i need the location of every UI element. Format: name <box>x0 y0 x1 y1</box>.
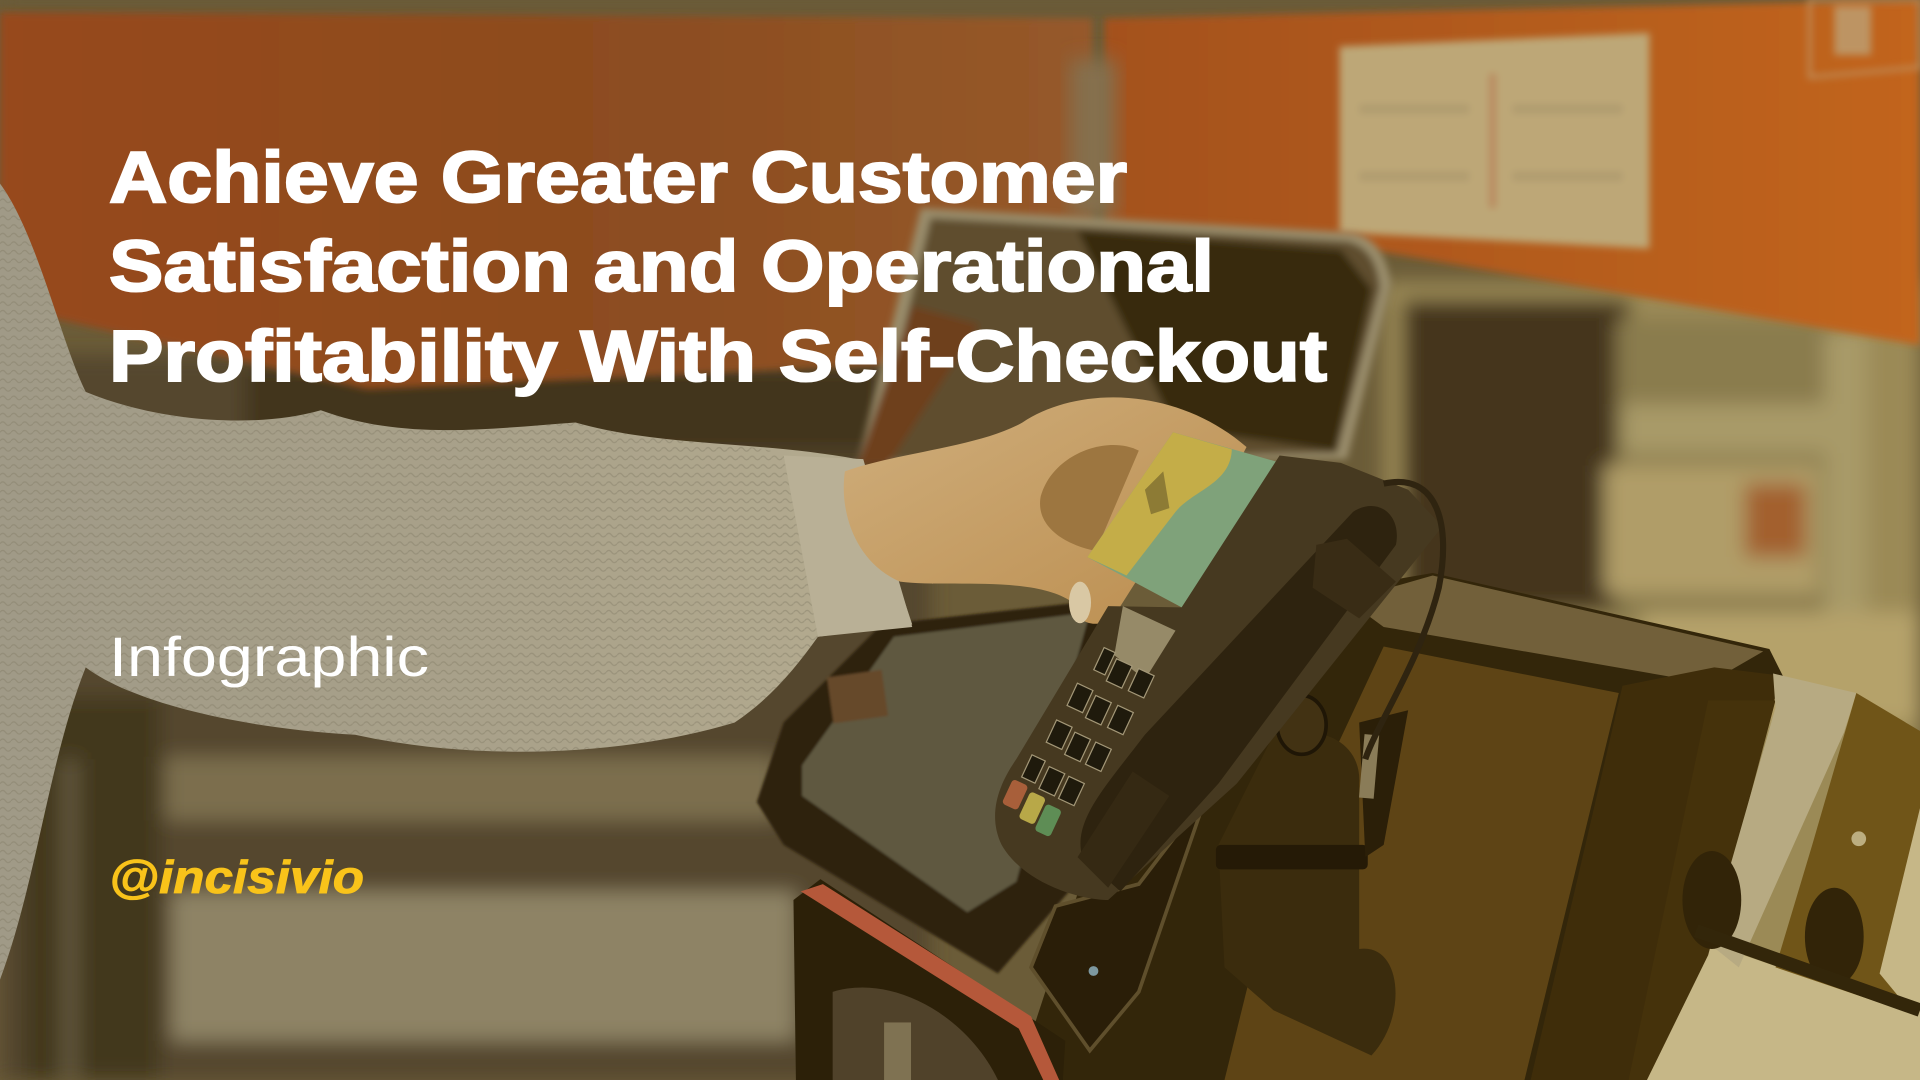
wall sign <box>1340 0 1920 249</box>
card terminal <box>995 456 1442 900</box>
back screen <box>857 208 1391 465</box>
orange wall <box>0 0 1920 389</box>
subtitle: Infographic: Infographic <box>109 625 429 688</box>
title <box>109 138 1327 397</box>
cable <box>1365 482 1443 759</box>
kiosk body <box>1016 573 1783 1080</box>
payment card <box>1087 432 1281 607</box>
right white fixture <box>1629 673 1920 1080</box>
left stand and screen base <box>793 796 1206 1080</box>
sweater arm <box>0 184 912 980</box>
lower screen <box>757 600 1102 973</box>
handle: @incisivio: @incisivio <box>109 851 364 903</box>
hand holding card <box>844 397 1247 624</box>
title line 3: Profitability With Self-Checkout <box>109 317 1327 397</box>
title line 2: Satisfaction and Operational <box>109 227 1214 307</box>
blurred post <box>1070 59 1117 218</box>
keypad <box>1022 648 1154 806</box>
title line 1: Achieve Greater Customer <box>109 138 1127 218</box>
